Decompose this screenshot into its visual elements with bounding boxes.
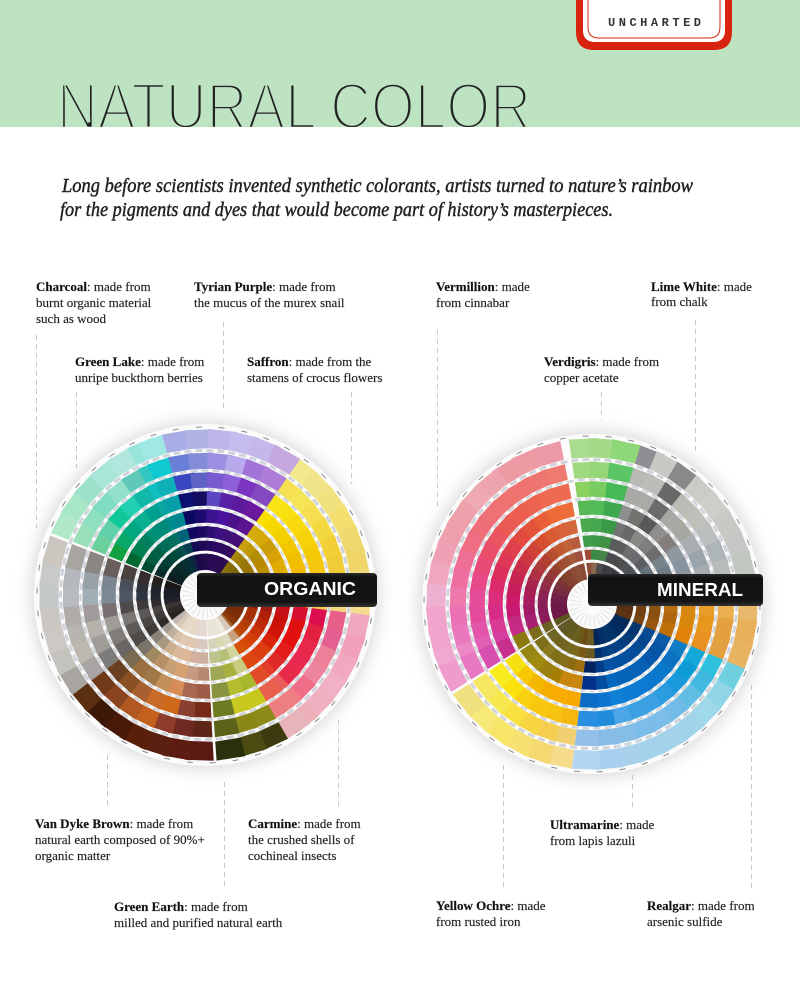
swatches: blue	[572, 603, 745, 770]
label: Ultramarine: : made	[619, 817, 654, 832]
label: Tyrian Purple: the mucus of the murex snail	[194, 295, 345, 310]
swatches: yellow	[209, 456, 371, 621]
label: Lime White: : made	[717, 279, 752, 294]
label bar: mineral: MINERAL	[657, 579, 743, 600]
label: Saffron: Saffron	[247, 354, 289, 369]
swatches: brown	[69, 600, 219, 761]
swatches: grey	[39, 535, 191, 695]
label: Van Dyke Brown: organic matter	[35, 848, 111, 863]
label: Verdigris: Verdigris	[544, 354, 596, 369]
label: Verdigris: copper acetate	[544, 370, 619, 385]
label: Green Earth: Green Earth	[114, 899, 185, 914]
intro text: for the pigments and dyes that would become part of history’s masterpieces.	[60, 199, 613, 221]
label: Saffron: stamens of crocus flowers	[247, 370, 382, 385]
swatches: red	[207, 586, 370, 740]
swatches: olive	[195, 612, 288, 761]
label: Ultramarine: from lapis lazuli	[550, 833, 636, 848]
label: Van Dyke Brown: Van Dyke Brown	[35, 816, 130, 831]
label bar: mineral	[588, 574, 763, 606]
swatches: grey	[587, 444, 758, 616]
label: Charcoal: burnt organic material	[36, 295, 152, 310]
badge: Uncharted: UNCHARTED	[608, 16, 701, 30]
label: Carmine: the crushed shells of	[248, 832, 355, 847]
label: Yellow Ochre: Yellow Ochre	[436, 898, 511, 913]
swatches: yellow	[453, 608, 601, 769]
label: Carmine: Carmine	[248, 816, 297, 831]
label: Lime White: from chalk	[651, 294, 708, 309]
label: Green Earth: : made from	[184, 899, 248, 914]
swatches: purple	[162, 429, 300, 581]
label: Green Lake: Green Lake	[75, 354, 141, 369]
label: Saffron: : made from the	[289, 354, 371, 369]
label: Yellow Ochre: from rusted iron	[436, 914, 521, 929]
wheel: organic	[33, 423, 377, 767]
label: Ultramarine: Ultramarine	[550, 817, 620, 832]
swatches: orange	[611, 591, 758, 672]
label: Tyrian Purple: Tyrian Purple	[194, 279, 272, 294]
swatches: pink and red	[426, 441, 599, 692]
label: Charcoal: Charcoal	[36, 279, 87, 294]
label: Realgar: : made from	[691, 898, 755, 913]
swatches: green	[569, 438, 641, 583]
label: Vermillion: : made	[495, 279, 530, 294]
badge: Uncharted	[576, 0, 732, 50]
label: Realgar: arsenic sulfide	[647, 914, 723, 929]
label: Realgar: Realgar	[647, 898, 691, 913]
label: Green Earth: milled and purified natural earth	[114, 915, 283, 930]
label: Green Lake: : made from	[141, 354, 204, 369]
label: Van Dyke Brown: natural earth composed of 90%+	[35, 832, 205, 847]
label: Yellow Ochre: : made	[510, 898, 546, 913]
label: Charcoal: such as wood	[36, 311, 107, 326]
intro text	[60, 175, 694, 221]
label: Carmine: : made from	[297, 816, 361, 831]
label: Charcoal: : made from	[87, 279, 151, 294]
label: Lime White: Lime White	[651, 279, 717, 294]
swatches: green	[51, 434, 211, 597]
label bar: organic: ORGANIC	[264, 578, 356, 599]
intro text: Long before scientists invented synthetic colorants, artists turned to nature’s rainbow	[61, 175, 694, 197]
label: Vermillion: from cinnabar	[436, 295, 510, 310]
label: Green Lake: unripe buckthorn berries	[75, 370, 203, 385]
label: Tyrian Purple: : made from	[272, 279, 336, 294]
label: Verdigris: : made from	[596, 354, 659, 369]
label: Van Dyke Brown: : made from	[130, 816, 193, 831]
label: Vermillion: Vermillion	[436, 279, 496, 294]
wheel: mineral	[420, 432, 764, 776]
label: Carmine: cochineal insects	[248, 848, 336, 863]
header band	[0, 0, 800, 127]
label bar: organic	[197, 573, 377, 607]
